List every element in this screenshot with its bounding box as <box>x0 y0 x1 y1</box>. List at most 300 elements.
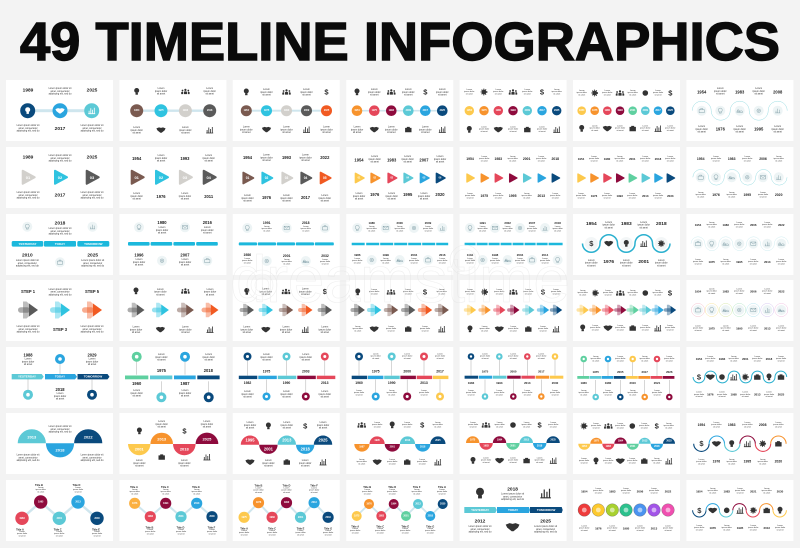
top labels: 1983 <box>495 157 502 161</box>
timeline circles: 2017 <box>539 109 545 112</box>
bottom items: 1998 <box>492 253 499 257</box>
panel: row 6 card 4 <box>346 413 453 474</box>
titles and labels: Title G <box>324 526 332 530</box>
bottom items: 2013 <box>524 381 531 385</box>
titles and labels <box>350 485 448 534</box>
bottom items: 2013 <box>321 381 329 385</box>
zigzag timeline: 2018 <box>428 514 434 518</box>
top labels: 1983 <box>621 221 632 227</box>
bottom items: 1982 <box>244 381 251 385</box>
top labels: 1989 <box>23 88 34 94</box>
bottom items <box>469 518 558 534</box>
bottom labels <box>351 126 446 134</box>
panel: row 4 card 2 <box>119 280 226 341</box>
top labels: 1954 <box>586 221 597 227</box>
bottom labels: 2013 <box>763 526 770 530</box>
timeline circles: 1993 <box>389 109 395 112</box>
bottom labels: 1976 <box>716 126 726 132</box>
bottom labels: STEP 3 <box>53 327 68 332</box>
titles and labels: Title E <box>192 485 200 489</box>
timeline circles: 2017 <box>423 109 429 112</box>
panel: row 2 card 1 <box>6 147 113 208</box>
top labels: STEP 1 <box>21 289 36 294</box>
bottom labels: 2013 <box>764 326 771 330</box>
top items: 2017 <box>538 370 545 374</box>
panel: row 3 card 7 <box>686 214 793 275</box>
top labels <box>354 88 449 97</box>
icons and labels <box>579 422 674 464</box>
bottom labels: 1975 <box>708 260 715 264</box>
panel: row 7 card 5 <box>460 480 567 541</box>
top labels: 1980 <box>604 157 611 161</box>
bottom labels <box>130 326 214 334</box>
timeline circles: 2025 <box>324 109 330 112</box>
semicircle timeline: 2018 <box>301 446 310 452</box>
panel: row 6 card 2 <box>119 413 226 474</box>
top items: 1980 <box>368 221 375 225</box>
semicircle timeline: 1983 <box>483 444 489 448</box>
semicircle timeline: 2001 <box>264 446 274 452</box>
top labels: 2018 <box>656 221 667 227</box>
semicircle timeline: 1954 <box>582 445 588 448</box>
bottom labels: 2020 <box>775 460 782 464</box>
bottom items: 1960 <box>132 381 142 386</box>
top items: 1975 <box>482 370 489 374</box>
panel: row 3 card 4 <box>346 214 453 275</box>
triangles: 03 <box>390 176 394 180</box>
panel: row 4 card 6 <box>573 280 680 341</box>
zigzag timeline: 1976 <box>366 502 372 506</box>
panel: row 7 card 6 <box>573 480 680 541</box>
top items <box>242 221 330 233</box>
bottom items <box>133 252 212 267</box>
bottom items: 1999 <box>382 253 389 257</box>
bottom labels: 2013 <box>754 393 761 397</box>
panel: row 7 card 4 <box>346 480 453 541</box>
timeline circles <box>130 104 216 117</box>
titles and labels <box>239 484 334 536</box>
zigzag timeline: 2013 <box>311 501 317 504</box>
bottom labels: 2013 <box>651 526 658 530</box>
bottom items <box>242 253 330 266</box>
band <box>577 376 674 379</box>
bottom labels: 1975 <box>481 194 488 198</box>
band <box>465 243 563 245</box>
bottom items <box>354 380 444 400</box>
bottom labels: 1995 <box>737 526 744 530</box>
bottom items: 1990 <box>283 381 290 385</box>
top labels <box>134 87 216 96</box>
top labels <box>132 154 215 163</box>
semicircle timeline: 1994 <box>618 440 624 442</box>
triangles <box>355 173 445 183</box>
triangles: 01 <box>246 176 249 180</box>
bottom items: 2025 <box>87 252 98 258</box>
top labels: 2001 <box>629 157 636 161</box>
bottom items: 1993 <box>496 381 503 385</box>
semicircle timeline <box>466 436 560 450</box>
zigzag timeline: 1983 <box>379 514 385 518</box>
timeline circles: 1954 <box>244 109 250 112</box>
bottom labels: 2017 <box>55 126 66 132</box>
bottom items: 1960 <box>580 381 587 385</box>
top labels: 1954 <box>697 157 705 161</box>
top items: 2018 <box>507 486 518 492</box>
timeline circles: 2017 <box>655 109 661 112</box>
top labels <box>586 221 667 229</box>
top labels: 2022 <box>320 155 330 160</box>
timeline circles: 2009 <box>304 109 310 112</box>
top labels <box>577 88 673 98</box>
semicircle timeline: 2013 <box>282 438 292 442</box>
panel: row 1 card 3 <box>233 80 340 141</box>
panel: row 6 card 7 <box>686 413 793 474</box>
top labels <box>464 88 562 96</box>
top labels <box>243 154 330 162</box>
semicircle timeline: 2022 <box>84 435 93 440</box>
bottom items: 2025 <box>540 518 551 524</box>
triangles <box>132 171 216 184</box>
top labels: 1989 <box>23 154 34 160</box>
panel: row 1 card 7 <box>686 80 793 141</box>
top labels <box>697 87 783 96</box>
top labels <box>695 288 785 295</box>
timeline circles: 1975 <box>372 109 378 112</box>
top labels: 2006 <box>750 290 757 294</box>
zigzag timeline <box>15 495 104 525</box>
bottom labels <box>693 326 787 332</box>
top labels <box>465 288 562 296</box>
triangles: 02 <box>58 175 63 180</box>
arrows <box>350 304 449 316</box>
panel: row 1 card 5 <box>460 80 567 141</box>
panel: row 2 card 7 <box>686 147 793 208</box>
bottom labels: 2017 <box>301 195 311 200</box>
wave with icons <box>692 101 787 120</box>
semicircle timeline: 1983 <box>606 445 612 448</box>
semicircle timeline: 2013 <box>405 439 411 442</box>
top items: 1975 <box>263 369 270 373</box>
timeline circles: 1975 <box>158 109 164 112</box>
wave with icons <box>693 169 787 185</box>
bottom items: 2016 <box>439 253 446 257</box>
bottom items: 2018 <box>55 387 65 392</box>
top items: 2000 <box>403 369 411 373</box>
panel: row 1 card 2 <box>119 80 226 141</box>
band: TODAY <box>55 242 65 246</box>
triangles: 04 <box>304 176 307 180</box>
panel: row 4 card 4 <box>346 280 453 341</box>
titles and labels: Title C <box>54 528 62 532</box>
panel: row 1 card 1 <box>6 80 113 141</box>
bottom items <box>466 380 560 400</box>
titles and labels: Title F <box>208 526 216 530</box>
top labels: 1954 <box>578 157 585 161</box>
top labels: 1983 <box>723 490 730 494</box>
top labels <box>581 488 672 494</box>
timeline circles <box>241 105 332 116</box>
zigzag timeline: 1976 <box>256 501 262 504</box>
semicircle timeline <box>128 433 218 455</box>
top labels: 1993 <box>180 156 190 161</box>
panel: row 4 card 1 <box>6 280 113 341</box>
bottom labels: 2020 <box>775 193 783 197</box>
top labels: 2025 <box>87 88 98 94</box>
icons and labels <box>357 420 443 465</box>
top items: 2029 <box>87 352 97 358</box>
semicircle timeline: 1995 <box>245 438 255 442</box>
panel: row 3 card 6 <box>573 214 680 275</box>
bottom labels: 2013 <box>764 260 771 264</box>
band <box>12 241 109 247</box>
triangles: 01 <box>358 176 361 180</box>
zigzag timeline: 2001 <box>178 515 184 518</box>
titles and labels: Title D <box>283 484 291 488</box>
timeline circles: 1975 <box>592 109 598 112</box>
bottom labels: 1976 <box>370 192 380 197</box>
bottom labels: 1993 <box>616 194 623 198</box>
timeline circles: 1993 <box>617 109 623 112</box>
bottom labels: 1976 <box>262 195 272 200</box>
top items: 2018 <box>204 368 214 373</box>
semicircle timeline: 2001 <box>135 446 144 452</box>
band <box>352 376 448 379</box>
bottom labels: 2013 <box>642 194 649 198</box>
top items: 1980 <box>157 220 167 225</box>
top labels <box>21 288 100 296</box>
bottom labels: 1995 <box>509 194 517 198</box>
top items <box>580 356 675 378</box>
top labels: 1983 <box>722 290 729 294</box>
triangles: 06 <box>439 176 442 180</box>
top items: 1991 <box>263 221 271 225</box>
top labels: 2008 <box>773 90 783 94</box>
top labels: 1954 <box>696 490 703 494</box>
top items: 2000 <box>510 370 517 374</box>
top labels: 1954 <box>581 490 588 494</box>
bottom items: 2004 <box>517 253 524 257</box>
titles and labels: Title B <box>255 484 263 488</box>
top labels <box>696 488 784 494</box>
top labels <box>244 287 328 296</box>
bottom labels <box>694 525 786 531</box>
top labels: 1983 <box>609 490 616 494</box>
triangles: 04 <box>406 176 410 180</box>
titles and labels: Title D <box>176 526 184 530</box>
semicircle timeline: 2013 <box>642 440 648 442</box>
titles and labels <box>16 483 102 537</box>
top labels: 1954 <box>698 423 705 427</box>
bottom labels: 1976 <box>713 460 720 464</box>
zigzag timeline: 2013 <box>194 502 200 505</box>
semicircle timeline: 2018 <box>654 445 660 448</box>
panel: row 7 card 7 <box>686 480 793 541</box>
bottom items: 2014 <box>542 253 549 257</box>
top items: 2018 <box>554 221 561 225</box>
arrows <box>576 305 676 315</box>
top labels <box>697 156 784 162</box>
timeline circles: 1954 <box>579 109 585 112</box>
zigzag timeline: 1983 <box>148 515 154 518</box>
semicircle timeline <box>241 436 332 454</box>
bottom items <box>241 380 331 400</box>
icons and labels <box>133 420 213 468</box>
bottom items: 1960 <box>355 381 363 385</box>
panel: row 2 card 2 <box>119 147 226 208</box>
top items: 1991 <box>479 221 486 225</box>
semicircle timeline: 1994 <box>497 438 503 442</box>
bottom items: 2032 <box>321 254 329 258</box>
titles and labels: Title E <box>401 524 409 528</box>
band <box>125 376 220 379</box>
semicircle timeline: 2018 <box>56 447 65 452</box>
panel: row 6 card 6 <box>573 413 680 474</box>
timeline circles: 2009 <box>406 109 412 112</box>
panel: row 2 card 6 <box>573 147 680 208</box>
top labels: 2030 <box>777 490 784 494</box>
panel: row 1 card 6 <box>573 80 680 141</box>
top labels: 2018 <box>655 157 662 161</box>
panel: row 6 card 3 <box>233 413 340 474</box>
semicircle timeline: 1987 <box>359 446 365 448</box>
bottom labels <box>580 324 676 331</box>
bottom items: 2010 <box>22 252 33 258</box>
timeline circles: 2009 <box>525 109 531 112</box>
panel: row 5 card 1 <box>6 347 113 408</box>
zigzag timeline: 2030 <box>440 502 446 506</box>
arrows <box>464 305 562 315</box>
top labels: 1983 <box>719 357 726 361</box>
triangles: 03 <box>90 175 95 180</box>
bottom labels: 1976 <box>595 526 602 530</box>
top labels: 2006 <box>759 157 767 161</box>
titles and labels: Title E <box>297 526 305 530</box>
bottom labels: 1995 <box>736 260 743 264</box>
timeline circles: 1954 <box>134 109 140 112</box>
zigzag timeline: 1995 <box>38 500 44 504</box>
bottom labels <box>696 192 783 198</box>
top items <box>468 353 558 376</box>
semicircle timeline: 2001 <box>630 445 636 448</box>
bottom labels <box>579 526 674 532</box>
timeline circles: 2025 <box>440 109 446 112</box>
bottom labels: 1995 <box>623 526 630 530</box>
wave with icons <box>693 371 787 383</box>
rainbow circles with icons <box>578 504 674 516</box>
triangles <box>243 172 331 184</box>
bottom labels <box>694 392 785 398</box>
top labels: 2018 <box>552 157 559 161</box>
top labels <box>355 288 447 296</box>
top items <box>465 221 563 233</box>
titles and labels: Title E <box>92 528 100 532</box>
top items: 2018 <box>55 220 66 226</box>
band: YESTERDAY <box>471 508 489 512</box>
timeline circles: 1980 <box>496 109 502 112</box>
panel: row 5 card 7 <box>686 347 793 408</box>
top labels: STEP 5 <box>85 289 100 294</box>
top labels: 2001 <box>742 357 749 361</box>
top labels: 1954 <box>466 157 474 161</box>
top items: 1988 <box>23 352 33 358</box>
zigzag timeline: 1994 <box>163 502 169 505</box>
timeline circles: 2009 <box>643 109 649 112</box>
top labels: 2021 <box>750 490 757 494</box>
zigzag timeline <box>129 498 218 522</box>
icons and labels <box>468 420 559 464</box>
titles and labels: Title D <box>73 483 81 487</box>
top labels <box>134 288 216 296</box>
band: YESTERDAY <box>18 375 36 379</box>
titles and labels: Title G <box>426 524 434 528</box>
top labels: 1954 <box>243 155 253 160</box>
top items: 2009 <box>425 221 432 225</box>
top items: 2000 <box>396 221 403 225</box>
panel: row 7 card 3 <box>233 480 340 541</box>
bottom items <box>352 253 448 265</box>
panel: row 2 card 4 <box>346 147 453 208</box>
band <box>239 376 335 379</box>
triangles: 01 <box>134 175 140 180</box>
top items <box>22 352 98 377</box>
top items: 1975 <box>592 370 599 374</box>
triangles: 01 <box>26 175 31 180</box>
bottom labels: 1976 <box>591 194 598 198</box>
panel: row 4 card 3 <box>233 280 340 341</box>
triangles <box>578 174 675 182</box>
timeline circles <box>465 106 561 115</box>
bottom items: 1986 <box>354 253 361 257</box>
bottom labels: 2001 <box>638 259 649 265</box>
top items <box>134 220 214 235</box>
top labels: 1983 <box>735 90 745 94</box>
semicircle timeline: 2001 <box>510 444 516 448</box>
bottom items <box>465 253 563 265</box>
semicircle timeline: 2025 <box>435 439 441 442</box>
zigzag timeline <box>238 497 334 523</box>
bottom labels: 1995 <box>403 192 413 197</box>
timeline circles: 2018 <box>207 109 213 112</box>
semicircle timeline: 1975 <box>470 438 476 442</box>
icons and labels <box>244 421 329 468</box>
triangles <box>23 171 99 184</box>
top items: 1975 <box>372 369 380 373</box>
top items: 2017 <box>436 369 444 373</box>
bottom labels <box>241 194 331 203</box>
bottom labels <box>693 259 787 265</box>
top labels: 2006 <box>637 490 644 494</box>
band <box>352 243 448 245</box>
top items: 1975 <box>157 368 167 373</box>
zigzag timeline: 2001 <box>403 514 409 518</box>
titles and labels <box>130 485 218 535</box>
triangles: 02 <box>373 176 377 180</box>
titles and labels: Title F <box>310 484 318 488</box>
titles and labels: Title H <box>438 485 446 489</box>
panel: row 5 card 2 <box>119 347 226 408</box>
panel: row 3 card 1 <box>6 214 113 275</box>
bottom items <box>131 381 214 402</box>
top items <box>244 352 329 376</box>
bottom labels: 1975 <box>708 326 715 330</box>
band <box>464 507 563 513</box>
panel: row 4 card 5 <box>460 280 567 341</box>
top labels: 2008 <box>759 423 767 427</box>
titles and labels: Title A <box>351 524 359 528</box>
titles and labels: Title B <box>145 526 153 530</box>
panel: row 3 card 2 <box>119 214 226 275</box>
semicircle timeline: 2013 <box>27 435 37 440</box>
